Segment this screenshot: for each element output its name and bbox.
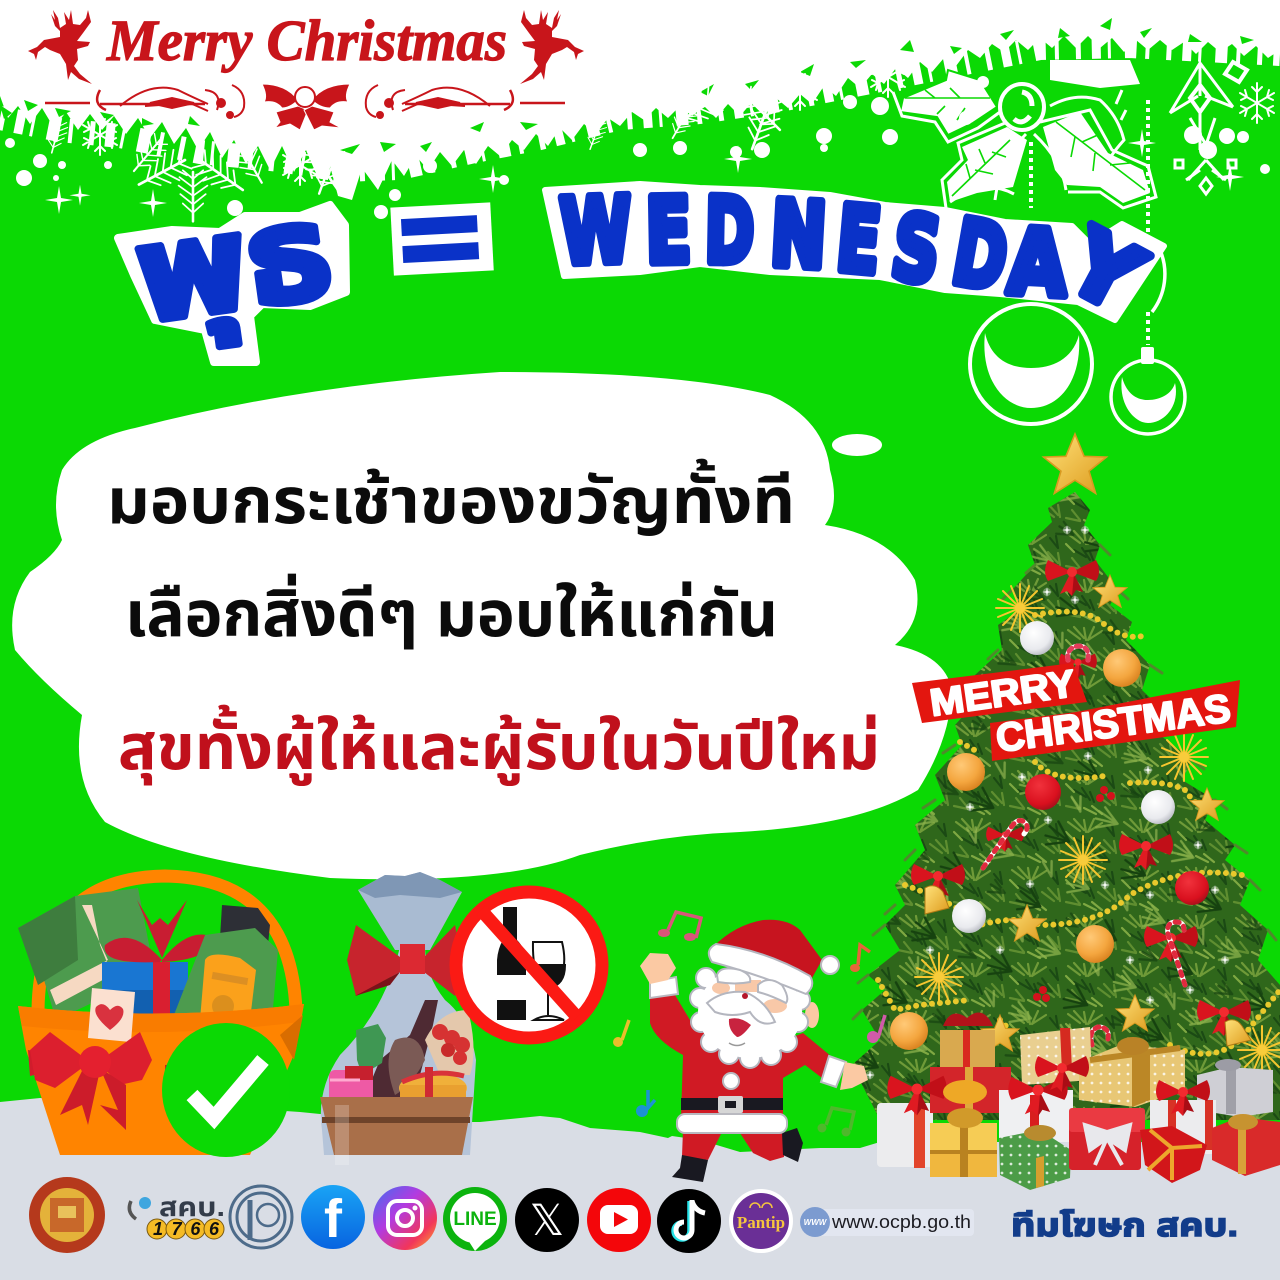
gift card <box>88 988 135 1042</box>
christmas tree <box>844 434 1280 1120</box>
title word: WEDNESDAY <box>558 178 1159 334</box>
snow decorations: berries, ferns, flakes <box>5 57 1274 221</box>
title word: WEDNESDAY: S <box>886 195 947 305</box>
hat pompom <box>821 956 839 974</box>
black bottle <box>220 905 270 945</box>
bag neck <box>358 872 462 950</box>
no alcohol sign <box>456 892 602 1038</box>
title word: WEDNESDAY: D <box>704 178 755 284</box>
holly leaf: upper left <box>900 70 997 135</box>
holly veins: lower right <box>1056 122 1145 190</box>
dotted ornament strings <box>1031 100 1148 345</box>
holly ornament: top right <box>871 60 1270 345</box>
icon: LINE: LINE <box>453 1209 497 1230</box>
gift: gold top <box>940 1013 995 1070</box>
body and arms <box>650 995 832 1118</box>
message line 3 highlight: สุขทั้งผู้ให้และผู้รับในวันปีใหม่ <box>118 704 880 786</box>
ornament ball: large <box>970 304 1092 424</box>
tree garlands <box>878 612 1280 1054</box>
icon: X <box>515 1188 579 1252</box>
title: พุธ = WEDNESDAY <box>118 176 1164 362</box>
tree foliage <box>852 492 1280 1120</box>
title word: WEDNESDAY: E <box>645 179 692 284</box>
gift: gold front <box>930 1123 997 1177</box>
bag top frill <box>358 872 462 898</box>
seal: OCPB crest <box>29 1177 105 1253</box>
hanging snowflake pendant <box>1116 62 1247 194</box>
white fringe along snow edge <box>0 46 1280 170</box>
message line 1: มอบกระเช้าของขวัญทั้งที <box>107 458 795 537</box>
tree baubles <box>890 621 1209 1050</box>
holly leaf: upper right outline <box>1050 97 1124 158</box>
holly leaf: lower left <box>947 127 1027 202</box>
gift: green polka <box>999 1130 1071 1190</box>
gift: red right <box>1212 1117 1280 1176</box>
title word: WEDNESDAY: Y <box>1050 209 1159 334</box>
icon: YouTube <box>587 1188 651 1252</box>
bottle highlight <box>388 1038 425 1095</box>
holly bow center <box>262 84 350 130</box>
yellow box <box>399 1067 467 1103</box>
logo: OCPB 1766 hotline: สคบ. <box>159 1192 225 1222</box>
holly leaf outline: lower right <box>1040 110 1156 208</box>
icon: reindeer right <box>520 10 584 84</box>
icon: Instagram <box>373 1186 437 1250</box>
face details <box>707 968 787 1046</box>
holly leaf: lower right <box>1043 112 1150 203</box>
team label: ทีมโฆษก สคบ. <box>1011 1207 1238 1243</box>
holly veins: upper left <box>905 88 990 120</box>
snow patch behind holly <box>1050 60 1140 88</box>
tree berries <box>1033 786 1115 1002</box>
holly leaf outline: lower left <box>942 123 1014 208</box>
title band white <box>545 184 1164 320</box>
ornament ball: small <box>1111 347 1185 434</box>
icon: LINE <box>443 1187 507 1251</box>
tree star <box>1044 434 1106 493</box>
website link: www.ocpb.go.th <box>831 1212 971 1232</box>
basket handle <box>38 876 296 1010</box>
gift: silver right <box>1197 1067 1273 1117</box>
beard <box>690 966 810 1068</box>
gift pile <box>877 1013 1280 1190</box>
tree foliage overlay <box>852 492 1280 1120</box>
speech bubble: small blob <box>832 434 882 456</box>
gift bows <box>887 1037 1258 1141</box>
banner: MERRY CHRISTMAS: CHRISTMAS <box>993 686 1233 761</box>
tree canes <box>983 646 1185 1045</box>
boots <box>672 1128 803 1182</box>
snow ground: grey lower band <box>0 1098 1280 1280</box>
title word: พุธ: พุธ <box>127 176 341 357</box>
gift: red middle <box>930 1067 1011 1113</box>
hands <box>640 953 868 1090</box>
ear <box>805 1002 819 1028</box>
logo: OCPB 1766 hotline <box>129 1192 225 1239</box>
green flecks inside snow <box>0 18 1254 154</box>
message text block <box>107 458 880 786</box>
icon: reindeer left <box>28 10 92 84</box>
holly ring <box>1000 84 1044 130</box>
banner: MERRY CHRISTMAS <box>912 663 1240 761</box>
gift: white with red ribbon <box>1150 1100 1216 1154</box>
banner: MERRY CHRISTMAS: MERRY <box>927 663 1078 725</box>
pendant berries <box>871 75 1270 174</box>
heading: Merry Christmas script <box>28 8 584 130</box>
music notes <box>613 912 885 1136</box>
holly veins: lower left <box>952 140 1010 196</box>
holly leaf outline: upper left <box>893 92 1000 142</box>
gift: gold large <box>1079 1045 1185 1107</box>
footer: logos and social icons <box>29 1177 1238 1253</box>
bottle <box>497 907 526 1020</box>
logo: OCPB 1766 hotline: 1766 <box>153 1219 220 1239</box>
title word: WEDNESDAY: A <box>1006 209 1070 317</box>
pink gift <box>329 1066 373 1104</box>
basket rim <box>18 1004 304 1032</box>
coat button <box>723 1073 739 1089</box>
website link: WWW <box>804 1218 828 1227</box>
legs <box>682 1130 784 1161</box>
wicker basket <box>320 1097 473 1165</box>
basket body <box>18 1004 304 1155</box>
slash <box>481 910 577 1017</box>
message line 2: เลือกสิ่งดีๆ มอบให้แก่กัน <box>125 573 778 650</box>
title word: WEDNESDAY: E <box>833 187 885 295</box>
red bow <box>28 1032 240 1130</box>
hat band <box>709 944 812 994</box>
bag body <box>321 947 476 1155</box>
cuffs <box>650 977 846 1087</box>
scroll flourish right <box>366 85 565 118</box>
icon: X: 𝕏 <box>530 1197 564 1245</box>
icon: TikTok <box>657 1189 721 1253</box>
gift: white left <box>877 1103 933 1168</box>
icon: Pantip <box>729 1189 793 1253</box>
wine bottle <box>362 1000 438 1103</box>
holly ribbon lines <box>995 134 1066 200</box>
tree feathered edge <box>844 545 1276 1071</box>
gift bag: prohibited alcohol <box>320 872 602 1165</box>
title word: WEDNESDAY: N <box>768 182 829 289</box>
tree bursts <box>996 584 1044 632</box>
tree bows <box>911 560 1251 1036</box>
website link <box>800 1207 974 1237</box>
blue gift box <box>102 900 215 1017</box>
equals sign <box>390 202 494 276</box>
flowers <box>425 1010 474 1075</box>
title word: WEDNESDAY: D <box>945 200 1015 312</box>
santa <box>613 912 885 1182</box>
green tin with label <box>172 928 278 1020</box>
ornament ball: behind title <box>1152 250 1165 312</box>
logo: CPB <box>230 1186 292 1248</box>
basket shadow <box>280 1015 303 1060</box>
tree sparkles <box>865 525 1230 1080</box>
speech bubble: white cloud <box>12 372 952 879</box>
icon: Facebook: f <box>324 1189 343 1249</box>
gift basket: approved <box>18 876 304 1157</box>
gift: white center <box>999 1090 1073 1142</box>
wine glass <box>533 942 565 1020</box>
gift: gold dotted tall <box>1020 1027 1092 1085</box>
scroll flourish left <box>45 85 244 118</box>
gift: red heart tilted <box>1140 1126 1207 1183</box>
red bow <box>347 925 462 996</box>
icon: Pantip: Pantip <box>737 1213 785 1232</box>
hat <box>714 920 822 978</box>
gift: red lidded <box>1069 1108 1145 1170</box>
green box <box>18 888 152 1020</box>
check badge <box>162 1023 290 1157</box>
heading: Merry Christmas script: Merry Christmas <box>106 8 507 73</box>
coat hem <box>677 1114 787 1133</box>
tree bells <box>925 886 1251 1046</box>
green item <box>356 1024 386 1075</box>
title word: WEDNESDAY: W <box>558 178 633 285</box>
snow drift: white top band with jagged edge <box>0 0 1280 200</box>
belt <box>681 1096 783 1113</box>
icon: Facebook <box>301 1185 365 1249</box>
tree stars <box>981 575 1224 1051</box>
